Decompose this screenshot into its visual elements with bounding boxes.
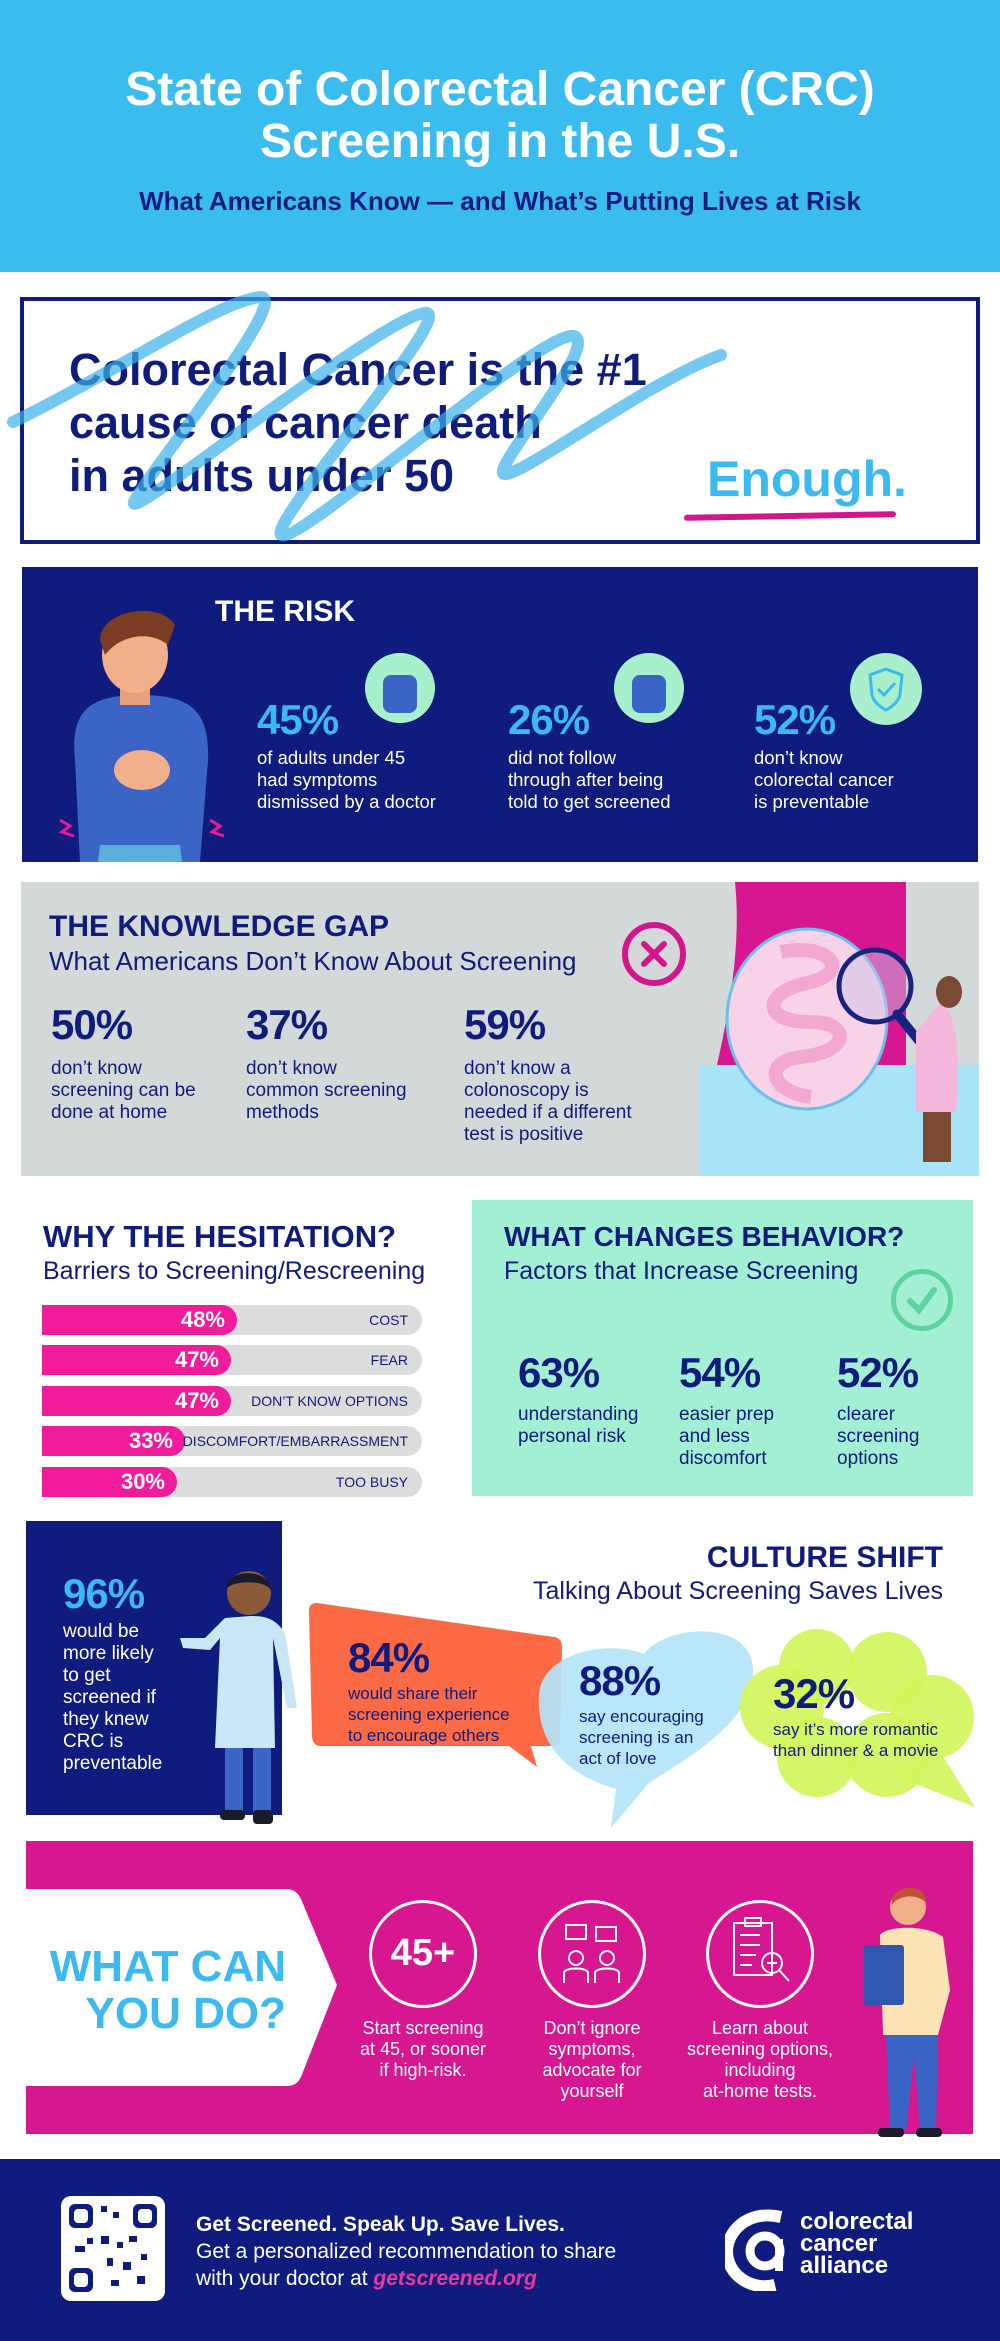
bar chart: barriers: 33% xyxy=(129,1428,173,1453)
logo: cancer xyxy=(800,2230,877,2257)
bubble: 32 cloud: say it’s more romantic xyxy=(773,1720,938,1739)
title xyxy=(125,63,875,168)
bubble: 88 heart xyxy=(538,1631,754,1828)
stat 96: screened if xyxy=(63,1687,156,1708)
stat 59: test is positive xyxy=(464,1124,583,1145)
stat 37: methods xyxy=(246,1102,319,1123)
stat 45: dismissed by a doctor xyxy=(257,791,436,812)
stat 26 xyxy=(508,696,670,812)
heading: WHAT CHANGES BEHAVIOR? xyxy=(504,1221,904,1252)
subheading: Barriers to Screening/Rescreening xyxy=(43,1257,425,1285)
stat 52 xyxy=(837,1349,919,1469)
stat 59: 59% xyxy=(464,1001,545,1048)
stat 52: is preventable xyxy=(754,791,869,812)
heading: culture shift xyxy=(533,1541,943,1605)
footer xyxy=(0,2159,1000,2341)
bubble: 88 heart: say encouraging xyxy=(579,1707,704,1726)
subheading: Factors that Increase Screening xyxy=(504,1257,858,1285)
action: learn: at-home tests. xyxy=(703,2081,817,2101)
stat 45 xyxy=(257,696,436,812)
bar chart: barriers: 48% xyxy=(181,1307,225,1332)
stat 50: 50% xyxy=(51,1001,132,1048)
icon: check circle xyxy=(891,1269,953,1331)
logo: alliance xyxy=(800,2252,888,2279)
bubble: 32 cloud: than dinner & a movie xyxy=(773,1741,938,1760)
bubble: 32 cloud: 32% xyxy=(773,1670,854,1717)
underline xyxy=(684,511,896,521)
arrow banner xyxy=(26,1889,337,2086)
stat 96: preventable xyxy=(63,1753,162,1774)
action: advocate xyxy=(538,1900,646,2101)
stat 96: 96% xyxy=(63,1570,144,1617)
stat 96: they knew xyxy=(63,1709,149,1730)
header xyxy=(0,0,1000,272)
stat 96: more likely xyxy=(63,1643,154,1664)
stat 50: screening can be xyxy=(51,1080,196,1101)
enough: Enough. xyxy=(707,451,907,507)
stat 96 xyxy=(63,1570,162,1774)
illustration: torso with magnifier xyxy=(699,882,979,1176)
footer text: with your doctor at getscreened.org xyxy=(196,2267,537,2290)
stat 52: options xyxy=(837,1448,898,1469)
footer text: Get Screened. Speak Up. Save Lives. xyxy=(196,2213,565,2236)
icon: person phone xyxy=(614,653,684,723)
illustration: doctor xyxy=(180,1571,297,1824)
bubble: 84: screening experience xyxy=(348,1705,510,1724)
bar chart: barriers: COST xyxy=(369,1312,408,1328)
bar chart: barriers: 30% xyxy=(121,1469,165,1494)
stat 37: don’t know xyxy=(246,1058,337,1079)
action: learn: Learn about xyxy=(712,2018,808,2038)
illustration: person with clipboard xyxy=(864,1888,950,2137)
stat 52: colorectal cancer xyxy=(754,769,894,790)
stat 96: would be xyxy=(63,1621,139,1642)
panel: knowledge gap xyxy=(21,882,979,1176)
icon: shield xyxy=(850,653,922,725)
stat 59: colonoscopy is xyxy=(464,1080,589,1101)
heading: culture shift: CULTURE SHIFT xyxy=(707,1541,943,1574)
bar chart: barriers: 47% xyxy=(175,1388,219,1413)
logo: colorectal xyxy=(800,2208,913,2235)
stat 45: of adults under 45 xyxy=(257,747,405,768)
heading: knowledge gap: THE KNOWLEDGE GAP xyxy=(49,910,389,943)
stat 52: clearer xyxy=(837,1404,895,1425)
heading: hesitation: WHY THE HESITATION? xyxy=(43,1219,396,1254)
bubble: 84 xyxy=(309,1603,562,1767)
subtitle: What Americans Know — and What’s Putting Lives at Risk xyxy=(139,186,861,216)
action: advocate: symptoms, xyxy=(548,2039,636,2059)
bar chart: barriers: FEAR xyxy=(371,1352,408,1368)
bar chart: barriers: DON’T KNOW OPTIONS xyxy=(251,1393,408,1409)
action: 45+: if high-risk. xyxy=(379,2060,467,2080)
heading: what can you do: YOU DO? xyxy=(86,1989,286,2038)
stat 26: told to get screened xyxy=(508,791,670,812)
scribble xyxy=(7,291,727,542)
stat 52: 52% xyxy=(837,1349,918,1396)
hero statement: Colorectal Cancer is the #1 xyxy=(69,344,647,395)
bar chart: barriers: DISCOMFORT/EMBARRASSMENT xyxy=(183,1433,408,1449)
heading: culture shift: Talking About Screening Saves Lives xyxy=(533,1577,943,1605)
stat 59: don’t know a xyxy=(464,1058,571,1079)
stat 54: discomfort xyxy=(679,1448,767,1469)
action: learn: including xyxy=(724,2060,796,2080)
stat 96: CRC is xyxy=(63,1731,123,1752)
stat 63: understanding xyxy=(518,1404,638,1425)
panel: what can you do xyxy=(26,1841,973,2134)
icon: person toilet xyxy=(365,653,435,723)
subheading: What Americans Don’t Know About Screening xyxy=(49,946,577,976)
action: advocate: advocate for xyxy=(542,2060,642,2080)
stat 26: through after being xyxy=(508,769,663,790)
logo xyxy=(725,2208,913,2291)
stat 52: don’t know xyxy=(754,747,842,768)
action: learn: screening options, xyxy=(687,2039,833,2059)
stat 54 xyxy=(679,1349,774,1469)
heading: what can you do xyxy=(50,1942,286,2038)
hero statement xyxy=(69,344,647,501)
stat 37: 37% xyxy=(246,1001,327,1048)
hero statement: cause of cancer death xyxy=(69,397,542,448)
stat 52: 52% xyxy=(754,696,835,743)
stat 26: 26% xyxy=(508,696,589,743)
icon: x circle xyxy=(622,922,686,986)
panel: hesitation xyxy=(43,1219,425,1285)
title: Screening in the U.S. xyxy=(260,115,740,168)
action: advocate: yourself xyxy=(560,2081,624,2101)
bubble: 32 cloud xyxy=(740,1629,975,1807)
stat 63: 63% xyxy=(518,1349,599,1396)
stat 37: common screening xyxy=(246,1080,407,1101)
stat 50 xyxy=(51,1001,196,1123)
stat 59 xyxy=(464,1001,632,1145)
action: 45+ xyxy=(360,1900,486,2080)
stat 52: screening xyxy=(837,1426,919,1447)
panel: 96 percent xyxy=(26,1521,282,1815)
bubble: 84: 84% xyxy=(348,1634,429,1681)
stat 26: did not follow xyxy=(508,747,616,768)
stat 37 xyxy=(246,1001,407,1123)
qr code xyxy=(61,2196,165,2301)
stat 63 xyxy=(518,1349,638,1447)
bubble: 88 heart: 88% xyxy=(579,1657,660,1704)
action: 45+: at 45, or sooner xyxy=(360,2039,486,2059)
hero box xyxy=(20,297,980,544)
stat 96: to get xyxy=(63,1665,111,1686)
panel: what changes behavior xyxy=(472,1200,973,1496)
bar chart: barriers: 47% xyxy=(175,1347,219,1372)
illustration: man xyxy=(58,610,224,862)
action: 45+: 45+ xyxy=(391,1932,455,1974)
bubble: 84: would share their xyxy=(348,1684,477,1703)
stat 59: needed if a different xyxy=(464,1102,632,1123)
bubble: 88 heart: screening is an xyxy=(579,1728,693,1747)
stat 63: personal risk xyxy=(518,1426,626,1447)
stat 54: easier prep xyxy=(679,1404,774,1425)
bar chart: barriers xyxy=(42,1305,422,1497)
action: learn xyxy=(687,1900,833,2101)
action: advocate: Don’t ignore xyxy=(543,2018,641,2038)
action: 45+: Start screening xyxy=(362,2018,484,2038)
heading: the risk: THE RISK xyxy=(215,595,355,628)
footer text xyxy=(196,2213,616,2290)
bar chart: barriers: TOO BUSY xyxy=(336,1474,408,1490)
hero statement: in adults under 50 xyxy=(69,450,454,501)
bubble: 84: to encourage others xyxy=(348,1726,499,1745)
stat 45: had symptoms xyxy=(257,769,377,790)
title: State of Colorectal Cancer (CRC) xyxy=(125,63,875,116)
panel: the risk xyxy=(22,567,978,862)
footer text: Get a personalized recommendation to share xyxy=(196,2240,616,2263)
stat 54: 54% xyxy=(679,1349,760,1396)
stat 50: done at home xyxy=(51,1102,167,1123)
stat 45: 45% xyxy=(257,696,338,743)
heading: what can you do: WHAT CAN xyxy=(50,1942,286,1991)
stat 50: don’t know xyxy=(51,1058,142,1079)
stat 54: and less xyxy=(679,1426,750,1447)
stat 52 xyxy=(754,696,894,812)
bubble: 88 heart: act of love xyxy=(579,1749,656,1768)
